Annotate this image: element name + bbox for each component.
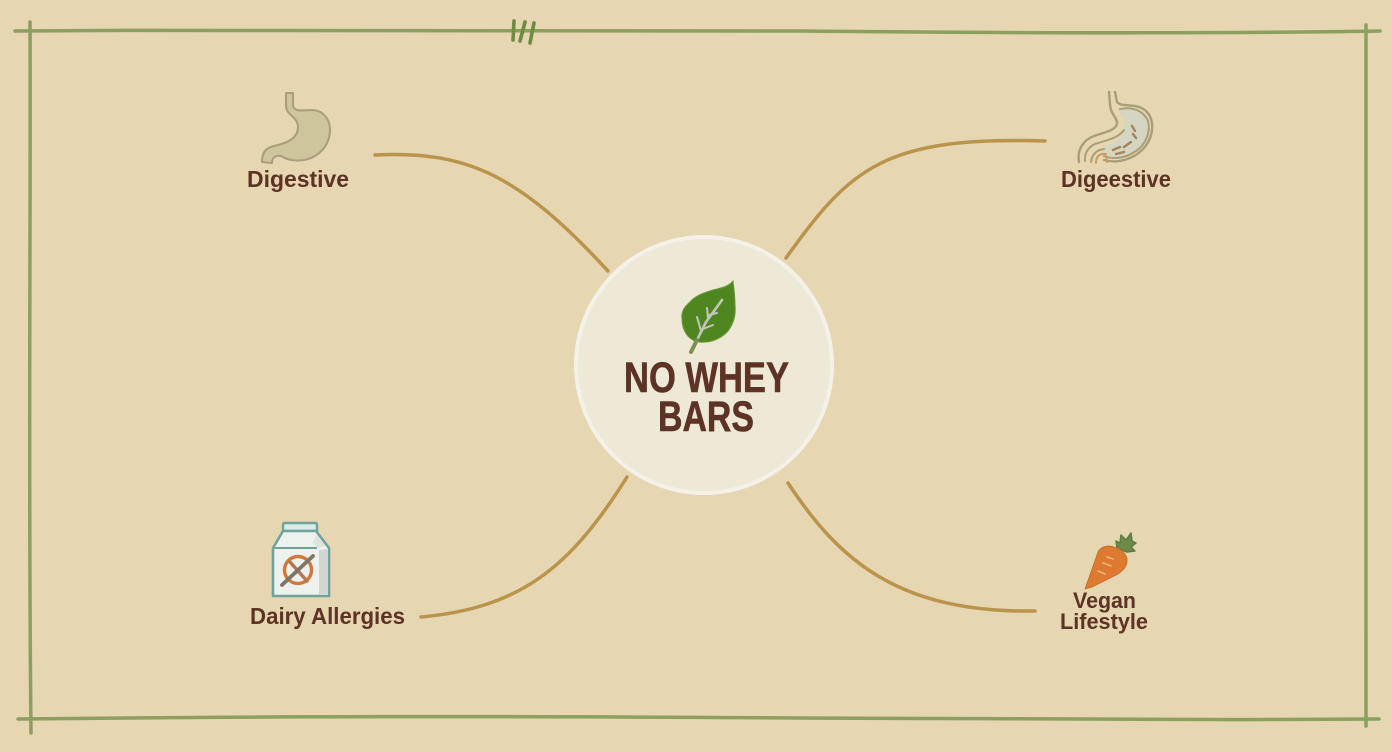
icon: leaf <box>682 281 735 352</box>
connector: centre to Digestive <box>375 154 608 271</box>
central hub <box>576 237 832 493</box>
connector: centre to Dairy Allergies <box>421 477 627 617</box>
title: NO WHEY BARS: NO WHEY <box>624 354 789 402</box>
label: Vegan Lifestyle: Lifestyle <box>1060 609 1148 634</box>
icon: milk carton crossed out <box>273 523 329 596</box>
title: NO WHEY BARS: BARS <box>658 393 754 441</box>
label: Digestive: Digestive <box>247 166 349 192</box>
label: Vegan Lifestyle: Vegan <box>1073 588 1136 613</box>
icon: carrot <box>1085 533 1136 589</box>
node: Digestive <box>247 93 349 192</box>
connector: centre to Digeestive <box>786 140 1045 258</box>
node: Dairy Allergies <box>250 523 405 629</box>
hub circle <box>576 237 832 493</box>
title: NO WHEY BARS <box>624 354 789 441</box>
connector: centre to Vegan Lifestyle <box>788 483 1035 611</box>
label: Dairy Allergies: Dairy Allergies <box>250 603 405 629</box>
label: Digeestive: Digeestive <box>1061 166 1171 192</box>
icon: stomach <box>262 93 330 163</box>
tally marks on frame <box>513 21 534 43</box>
node: Vegan Lifestyle <box>1060 533 1148 634</box>
label: Vegan Lifestyle <box>1060 588 1148 634</box>
icon: stomach with contents <box>1079 92 1152 163</box>
node: Digeestive <box>1061 92 1171 192</box>
